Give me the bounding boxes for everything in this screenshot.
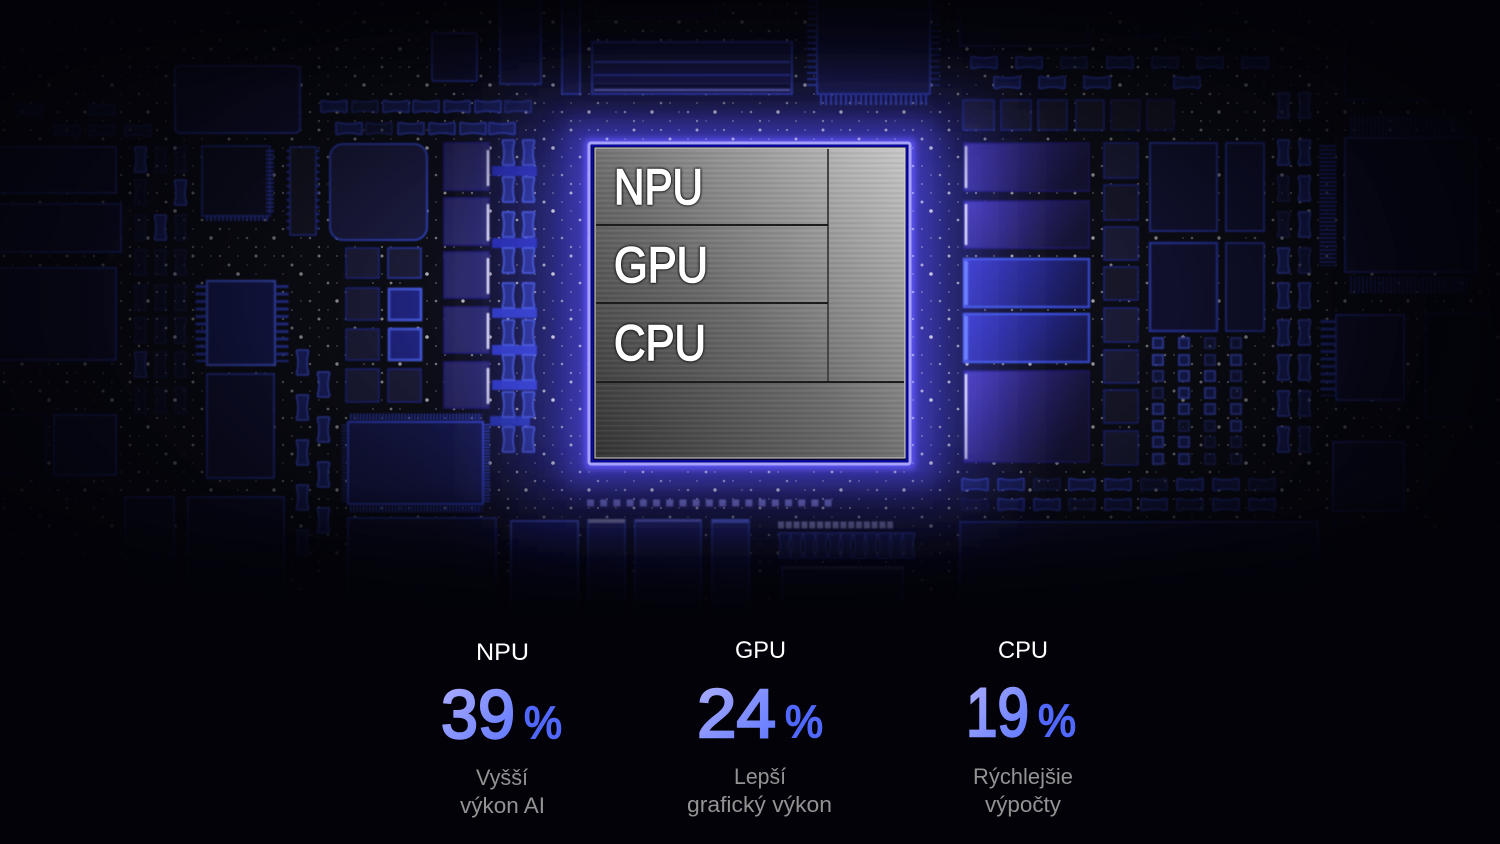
stat: GPU <box>687 637 832 817</box>
bottom background <box>0 619 1500 844</box>
stat: NPU: 39 <box>441 676 515 753</box>
components: far right <box>960 33 1490 622</box>
stat: CPU: CPU <box>998 637 1048 664</box>
via dots field <box>0 0 1500 640</box>
circuit board components <box>0 0 1490 627</box>
components: integrated circuits, left centre <box>201 144 487 509</box>
label: CPU on die: CPU <box>614 315 706 371</box>
components: far left <box>0 0 578 621</box>
components: right middle blocks <box>1104 93 1310 465</box>
stat: GPU: GPU <box>735 637 786 664</box>
stat: NPU: výkon AI <box>460 793 545 818</box>
stat: GPU: grafický výkon <box>687 792 832 817</box>
stat: GPU: Lepší <box>734 764 786 789</box>
components: left die stack and capacitor ladder <box>444 140 537 452</box>
blue glow around chip <box>510 110 990 500</box>
top fade <box>0 0 1500 90</box>
stat: CPU: výpočty <box>985 792 1061 817</box>
bottom fade <box>0 485 1500 620</box>
stat: NPU <box>441 639 562 818</box>
stat: GPU: 24 <box>697 675 776 752</box>
label: NPU on die: NPU <box>614 159 703 215</box>
stat: NPU: % <box>524 697 562 748</box>
components: horizontal capacitor rows, upper left <box>16 100 531 136</box>
stat: CPU: 19 <box>966 674 1029 751</box>
die texture <box>596 149 904 457</box>
die partition lines <box>596 149 904 382</box>
die surface <box>595 148 905 458</box>
right side fade <box>1280 0 1500 640</box>
label: GPU on die: GPU <box>614 237 708 293</box>
stat: GPU: % <box>785 696 823 747</box>
stat: CPU <box>966 637 1076 817</box>
components: right die stack <box>964 143 1089 462</box>
components: top centre <box>562 0 935 100</box>
components: right top rows <box>960 0 1268 130</box>
components: vertical capacitor columns, left <box>134 147 330 555</box>
stat: NPU: Vyšší <box>476 765 528 790</box>
stat: NPU: NPU <box>476 639 529 666</box>
components: capacitor rows, lower right <box>962 478 1275 510</box>
chip <box>589 143 910 464</box>
stat: CPU: Rýchlejšie <box>973 764 1073 789</box>
components: bottom centre <box>587 503 914 627</box>
stat: CPU: % <box>1038 695 1076 746</box>
